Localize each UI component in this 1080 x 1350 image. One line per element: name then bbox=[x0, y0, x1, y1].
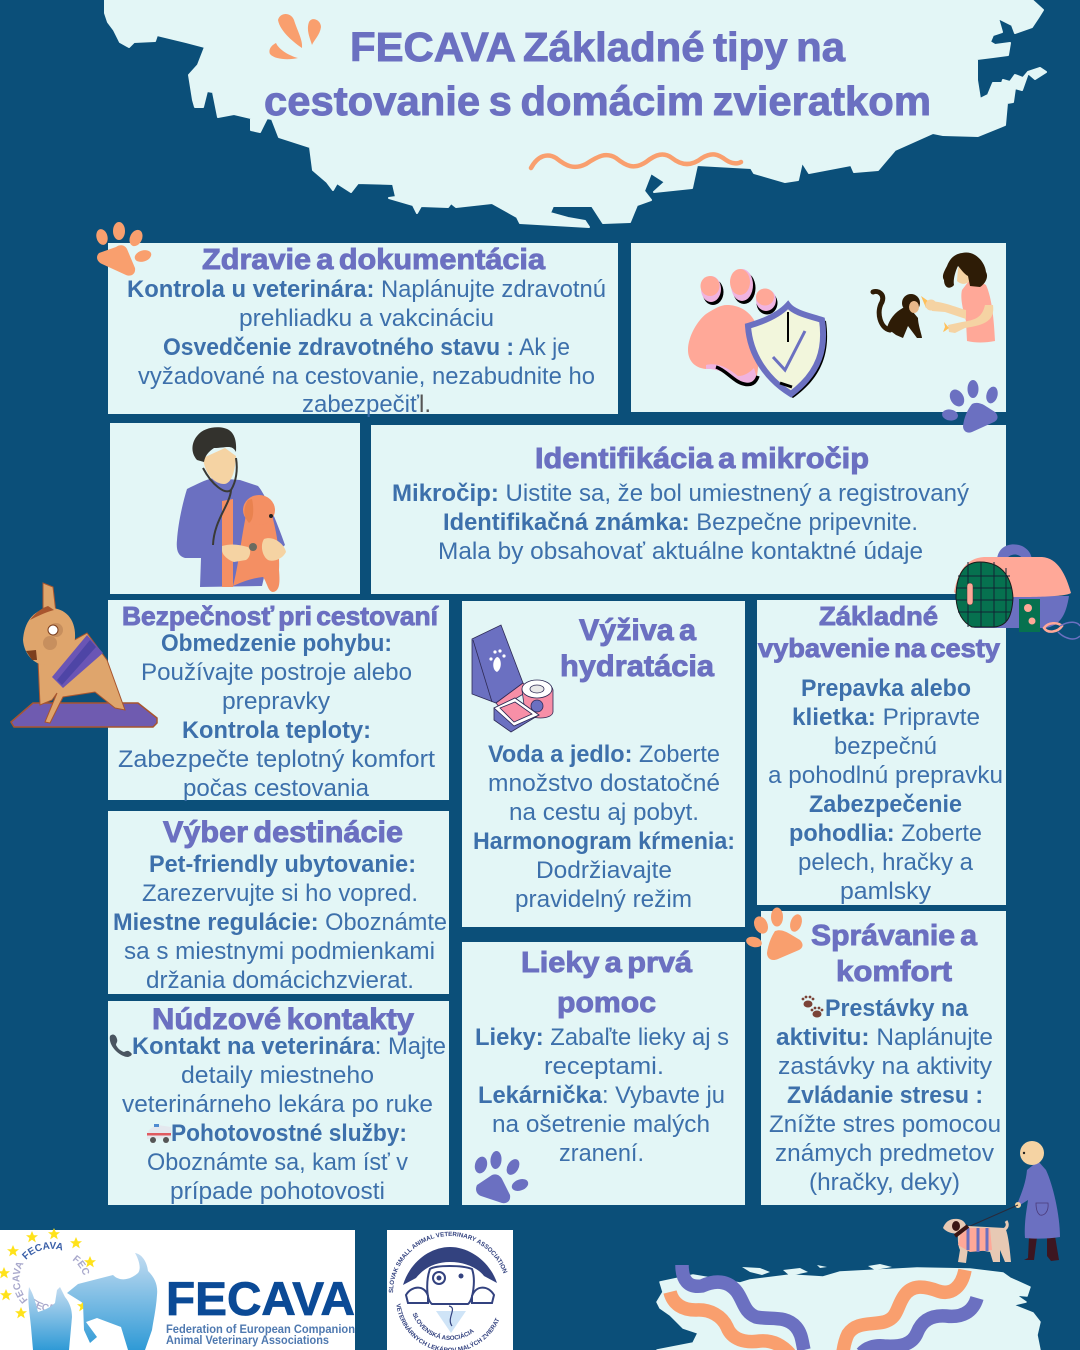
text block: pelech, hračky a bbox=[798, 849, 974, 876]
text block: Znížte stres pomocou bbox=[769, 1111, 1001, 1138]
heading: vybavenie na cesty bbox=[758, 633, 1001, 663]
icon: stars bbox=[0, 1228, 96, 1318]
text block: Kontakt na veterinára: Majte bbox=[132, 1033, 446, 1060]
panel: FECAVA logo bbox=[0, 1228, 355, 1350]
text block: zabezpečiťl. bbox=[302, 391, 431, 418]
icon: man walking dog bbox=[943, 1141, 1060, 1263]
panel: vet illustration bbox=[110, 423, 360, 594]
text block: aktivitu: Naplánujte bbox=[776, 1024, 993, 1051]
title bbox=[264, 24, 931, 124]
icon: woman feeding monkey bbox=[873, 253, 995, 342]
top brush blob bbox=[105, 0, 1046, 227]
icon: pet food bag and tin bbox=[472, 625, 553, 732]
icon: ambulance bbox=[147, 1124, 171, 1143]
heading: Lieky a prvá bbox=[521, 947, 693, 979]
text block: pamlsky bbox=[840, 878, 931, 905]
panel: Výber destinácie bbox=[108, 811, 449, 994]
panel: Bezpečnosť pri cestovaní bbox=[108, 600, 449, 802]
heading: Výživa a bbox=[579, 614, 696, 647]
wave: purple left bbox=[682, 1265, 804, 1350]
heading bbox=[758, 601, 1001, 663]
text block bbox=[118, 630, 435, 802]
heading bbox=[560, 614, 714, 683]
heading: hydratácia bbox=[560, 650, 714, 683]
text block: Osvedčenie zdravotného stavu : Ak je bbox=[163, 334, 570, 361]
text block: Obmedzenie pohybu: bbox=[161, 630, 392, 657]
text block: Pohotovostné služby: bbox=[171, 1120, 407, 1147]
text block: prípade pohotovosti bbox=[170, 1178, 385, 1205]
text block bbox=[475, 1024, 729, 1167]
logo subtitle: Animal Veterinary Associations bbox=[166, 1333, 329, 1347]
text block: Zvládanie stresu : bbox=[787, 1082, 983, 1109]
text block: na ošetrenie malých bbox=[492, 1111, 710, 1138]
text block: zranení. bbox=[559, 1140, 644, 1167]
panel: Správanie a komfort bbox=[761, 911, 1006, 1205]
icon: purple paw bbox=[941, 380, 1000, 433]
icon: orange paw top left bbox=[95, 222, 153, 276]
text block bbox=[113, 851, 447, 994]
icon: phone bbox=[110, 1035, 132, 1057]
text block: Kontrola u veterinára: Naplánujte zdravotnú bbox=[127, 276, 606, 303]
icon: orange splash bbox=[269, 14, 321, 59]
wave: orange left bbox=[670, 1292, 790, 1350]
logo ring text bbox=[388, 1232, 508, 1350]
text block: pravidelný režim bbox=[515, 886, 692, 913]
text block: (hračky, deky) bbox=[809, 1169, 960, 1196]
text block: Mikročip: Uistite sa, že bol umiestnený a registrovaný bbox=[392, 480, 969, 507]
logo ring text: FECAVA bbox=[22, 1242, 62, 1260]
text block: klietka: Pripravte bbox=[792, 704, 980, 731]
text block: držania domácichzvierat. bbox=[146, 967, 414, 994]
text block: veterinárneho lekára po ruke bbox=[122, 1091, 433, 1118]
logo ring text: FECAV bbox=[34, 1298, 54, 1310]
logo ring text: FEC bbox=[72, 1255, 90, 1275]
text block: Miestne regulácie: Oboznámte bbox=[113, 909, 447, 936]
text block: Lieky: Zabaľte lieky aj s bbox=[475, 1024, 729, 1051]
logo subtitle: Federation of European Companion bbox=[166, 1322, 355, 1336]
logo ring text: SLOVENSKÁ ASOCIÁCIA bbox=[412, 1312, 474, 1340]
text block bbox=[392, 480, 969, 565]
icon: cat and dog silhouette bbox=[28, 1253, 157, 1350]
text block: sa s miestnymi podmienkami bbox=[124, 938, 435, 965]
text block: Oboznámte sa, kam ísť v bbox=[147, 1149, 408, 1176]
icon: orange paw right bbox=[745, 908, 804, 960]
heading: pomoc bbox=[557, 987, 656, 1019]
panel: Núdzové kontakty bbox=[108, 1001, 449, 1205]
logo ring text bbox=[12, 1242, 90, 1310]
text block: Mala by obsahovať aktuálne kontaktné údaje bbox=[438, 538, 923, 565]
heading: Základné bbox=[819, 601, 938, 631]
panel: Slovak association logo bbox=[387, 1230, 513, 1350]
text block: Kontrola teploty: bbox=[182, 717, 371, 744]
text block bbox=[768, 675, 1003, 905]
text block: Zabezpečenie bbox=[809, 791, 962, 818]
text block bbox=[122, 1033, 446, 1205]
icon: vet with dog bbox=[177, 427, 286, 592]
panel: Identifikácia a mikročip bbox=[371, 425, 1006, 594]
text block: Prepavka alebo bbox=[801, 675, 971, 702]
monkey bbox=[873, 291, 890, 330]
text block: Pet-friendly ubytovanie: bbox=[149, 851, 416, 878]
panel: Lieky a prvá pomoc bbox=[462, 942, 745, 1205]
text block: Harmonogram kŕmenia: bbox=[473, 828, 735, 855]
text block bbox=[769, 995, 1001, 1196]
wave: orange right bbox=[843, 1270, 965, 1350]
text block: na cestu aj pobyt. bbox=[509, 799, 699, 826]
text block bbox=[127, 276, 606, 418]
wave: purple right bbox=[862, 1298, 977, 1350]
text block: detaily miestneho bbox=[181, 1062, 374, 1089]
panel: Zdravie a dokumentácia bbox=[108, 243, 618, 418]
text block: prepravky bbox=[222, 688, 330, 715]
heading: Zdravie a dokumentácia bbox=[202, 244, 546, 276]
icon: paw with shield bbox=[688, 269, 827, 398]
text block: Dodržiavajte bbox=[536, 857, 672, 884]
text block: Používajte postroje alebo bbox=[141, 659, 412, 686]
panel: illustrations shield and monkey bbox=[631, 243, 1006, 412]
text block: Prestávky na bbox=[825, 995, 969, 1022]
dog bbox=[233, 515, 279, 592]
text block: receptami. bbox=[544, 1053, 664, 1080]
text block: počas cestovania bbox=[183, 775, 370, 802]
heading: Správanie a bbox=[811, 920, 978, 952]
panel: Výživa a hydratácia bbox=[462, 601, 745, 927]
heading: Identifikácia a mikročip bbox=[535, 443, 869, 475]
text block: Lekárnička: Vybavte ju bbox=[478, 1082, 725, 1109]
heading: komfort bbox=[836, 956, 952, 988]
heading: Núdzové kontakty bbox=[152, 1003, 414, 1036]
text block: Zarezervujte si ho vopred. bbox=[142, 880, 418, 907]
logo emblem bbox=[403, 1247, 497, 1333]
text block: bezpečnú bbox=[834, 733, 937, 760]
title: FECAVA Základné tipy na bbox=[350, 24, 846, 70]
icon: orange wave under title bbox=[531, 154, 741, 168]
text block: množstvo dostatočné bbox=[488, 770, 720, 797]
title: cestovanie s domácim zvieratkom bbox=[264, 78, 931, 124]
logo ring text: SLOVAK SMALL ANIMAL VETERINARY ASSOCIATION bbox=[388, 1232, 508, 1293]
heading bbox=[521, 947, 693, 1019]
icon: small brown paws bbox=[802, 996, 823, 1018]
text block: Voda a jedlo: Zoberte bbox=[488, 741, 720, 768]
text block bbox=[473, 741, 735, 913]
text block: Zabezpečte teplotný komfort bbox=[118, 746, 435, 773]
logo wordmark: FECAVA bbox=[166, 1272, 355, 1325]
text block: známych predmetov bbox=[775, 1140, 994, 1167]
text block: Identifikačná známka: Bezpečne pripevnite. bbox=[443, 509, 918, 536]
text block: pohodlia: Zoberte bbox=[789, 820, 982, 847]
bottom brush blob bbox=[657, 1264, 1040, 1350]
heading: Výber destinácie bbox=[163, 816, 403, 849]
text block: a pohodlnú prepravku bbox=[768, 762, 1003, 789]
icon: yoga dog on mat bbox=[11, 583, 157, 727]
text block: prehliadku a vakcináciu bbox=[239, 305, 494, 332]
heading bbox=[811, 920, 978, 988]
text block: vyžadované na cestovanie, nezabudnite ho bbox=[138, 363, 595, 390]
logo ring text: FECAVA bbox=[12, 1262, 28, 1304]
heading: Bezpečnosť pri cestovaní bbox=[122, 601, 439, 631]
panel: Základné vybavenie na cesty bbox=[757, 600, 1006, 905]
icon: purple paw bbox=[473, 1151, 530, 1203]
icon: pet carrier with tag and collar bbox=[954, 544, 1080, 639]
logo subtitle bbox=[166, 1322, 355, 1347]
text block: zastávky na aktivity bbox=[778, 1053, 992, 1080]
